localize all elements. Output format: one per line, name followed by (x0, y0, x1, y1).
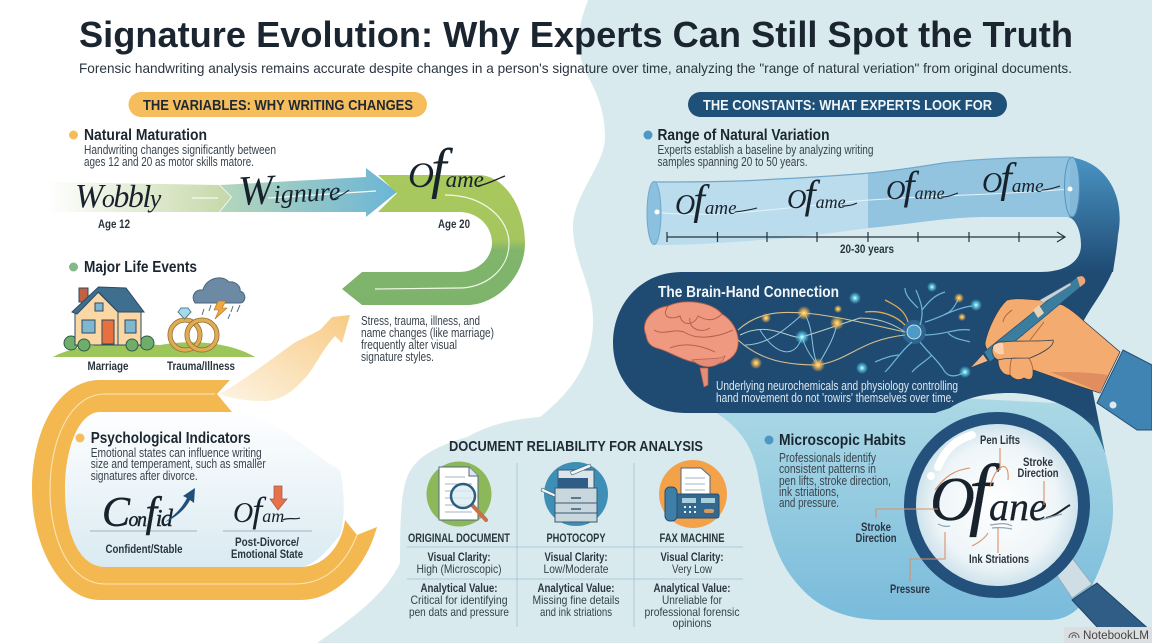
section: natural maturation: Natural Maturation (84, 127, 207, 144)
column: fax machine: Very Low (672, 562, 712, 576)
signature: confident: Confid (102, 490, 174, 536)
arrow: pale orange connector (219, 315, 350, 401)
tube: signature range (647, 157, 1080, 245)
signature: age 20: Ofame (408, 138, 484, 200)
label: age 20: Age 20 (438, 219, 470, 231)
arrow path: maturation ribbon (48, 168, 525, 305)
signatures in tube (675, 156, 1060, 224)
heading pill: the constants (688, 92, 1007, 117)
callout labels (856, 435, 1058, 596)
column: fax machine: FAX MACHINE (660, 531, 724, 545)
column: original document: pen dats and pressure (409, 605, 509, 619)
ground hill (53, 342, 255, 357)
heading pill: the variables: THE VARIABLES: WHY WRITING CHANGES (143, 97, 413, 114)
label: post-divorce: Emotional State (231, 549, 303, 561)
callout labels: Pen Lifts (980, 435, 1020, 447)
badge: notebooklm (1064, 627, 1152, 643)
ribbon: top curve (1040, 157, 1120, 272)
neural network (738, 288, 972, 376)
column: fax machine: professional forensic (644, 605, 740, 619)
label: marriage: Marriage (88, 361, 128, 373)
signature: magnified: Ofane (930, 450, 1047, 538)
section: range of natural variation: samples spanning 20 to 50 years. (658, 155, 808, 169)
icon: rings (170, 308, 217, 350)
icon: brain (644, 302, 738, 387)
signature: wignure: Wignure (237, 164, 341, 215)
icon: magnifying glass (910, 418, 1152, 643)
section: natural maturation: ages 12 and 20 as motor skills matore. (84, 155, 254, 169)
panel: psychological background (62, 408, 344, 570)
section: range of natural variation (644, 127, 874, 169)
title: Signature Evolution: Why Experts Can Still Spot the Truth (79, 14, 1073, 55)
callout labels: Pressure (890, 584, 930, 596)
section: psychological indicators: Psychological Indicators (91, 430, 251, 447)
column: photocopy: Missing fine details (532, 593, 620, 607)
label: trauma/illness: Trauma/Illness (167, 361, 235, 373)
column: original document: High (Microscopic) (416, 562, 502, 576)
column: original document (408, 531, 511, 619)
column: original document: Analytical Value: (420, 581, 498, 595)
heading pill: the constants: THE CONSTANTS: WHAT EXPERTS LOOK FOR (703, 97, 992, 114)
callout labels: Ink Striations (969, 554, 1029, 566)
text: life events description: frequently alter visual (361, 338, 457, 352)
icon: photocopy (541, 462, 608, 526)
callout labels: Stroke (861, 522, 891, 534)
callout labels: Direction (1018, 468, 1058, 480)
callout lines (876, 448, 1044, 582)
column: original document: Visual Clarity: (428, 550, 490, 564)
section: microscopic habits: Professionals identify (779, 451, 877, 465)
section: range of natural variation: Experts establish a baseline by analyzing writing (658, 143, 874, 157)
text: life events description: Stress, trauma, illness, and (361, 314, 480, 328)
signatures in tube: Ofame (886, 163, 945, 208)
section: psychological indicators: signatures after divorce. (91, 469, 198, 483)
column: fax machine: opinions (672, 616, 712, 630)
glowing nodes (750, 282, 982, 378)
icon: fax machine (659, 460, 727, 528)
column: fax machine: Visual Clarity: (660, 550, 724, 564)
panel: brain-hand band (613, 270, 1113, 453)
section: natural maturation (69, 127, 276, 169)
signatures in tube: Ofame (787, 172, 846, 217)
section: microscopic habits (764, 432, 906, 510)
column: fax machine: Analytical Value: (654, 581, 730, 595)
panel: microscopic habits background (715, 395, 1113, 620)
section: microscopic habits: pen lifts, stroke direction, (779, 474, 891, 488)
label: 20-30 years: 20-30 years (840, 244, 894, 256)
section: microscopic habits: and pressure. (779, 496, 839, 510)
signature: confident (90, 488, 197, 536)
text: life events description: signature styles. (361, 350, 434, 364)
heading: major life events: Major Life Events (84, 259, 197, 276)
column: fax machine (644, 531, 740, 630)
table grid (407, 463, 743, 627)
signature: post-divorce: Ofam (233, 490, 284, 530)
text: brain-hand description: hand movement do not 'rowirs' themselves over time. (716, 391, 954, 405)
section: psychological indicators: Emotional states can influence writing (91, 446, 262, 460)
arrow path: orange bracket (32, 380, 377, 600)
text: life events description: name changes (like marriage) (361, 326, 494, 340)
icon: house (64, 287, 154, 351)
signatures in tube: Ofame (982, 156, 1044, 202)
icon: storm cloud (193, 278, 245, 319)
column: original document: ORIGINAL DOCUMENT (408, 531, 511, 545)
signatures in tube: Ofame (675, 178, 737, 224)
column: photocopy: PHOTOCOPY (546, 531, 606, 545)
section: range of natural variation: Range of Natural Variation (658, 127, 830, 144)
timeline (667, 232, 1065, 242)
callout labels: Direction (856, 533, 896, 545)
section: microscopic habits: Microscopic Habits (779, 432, 906, 449)
heading: brain-hand connection: The Brain-Hand Connection (658, 284, 839, 301)
column: original document: Critical for identifying (410, 593, 508, 607)
text: life events description (361, 314, 494, 364)
section: microscopic habits: consistent patterns in (779, 462, 876, 476)
callout labels: Stroke (1023, 457, 1053, 469)
icon: hand with pen (970, 276, 1152, 430)
text: brain-hand description: Underlying neurochemicals and physiology controlling (716, 379, 958, 393)
signature: wobbly: Wobbly (75, 178, 162, 215)
label: confident/stable: Confident/Stable (106, 544, 182, 556)
heading: document reliability: DOCUMENT RELIABILITY FOR ANALYSIS (449, 438, 703, 455)
badge: notebooklm: NotebookLM (1083, 630, 1149, 642)
icon: original document (426, 462, 492, 526)
column: photocopy: Low/Moderate (544, 562, 609, 576)
label: post-divorce (231, 537, 303, 561)
section: psychological indicators (76, 430, 266, 483)
section: natural maturation: Handwriting changes significantly between (84, 143, 276, 157)
text: brain-hand description (716, 379, 958, 405)
section: psychological indicators: size and temperament, such as smaller (91, 457, 266, 471)
heading pill: the variables (128, 92, 427, 117)
label: age 12: Age 12 (98, 219, 130, 231)
column: fax machine: Unreliable for (662, 593, 722, 607)
column: photocopy: Analytical Value: (538, 581, 614, 595)
label: post-divorce: Post-Divorce/ (235, 537, 300, 549)
column: photocopy (532, 531, 620, 619)
signature: post-divorce (223, 486, 312, 531)
section: microscopic habits: ink striations, (779, 485, 839, 499)
column: photocopy: and ink striations (540, 605, 612, 619)
column: photocopy: Visual Clarity: (544, 550, 608, 564)
subtitle: Forensic handwriting analysis remains accurate despite changes in a person's signature over time, analyzing the "range of natural veriation" from original documents. (79, 60, 1072, 76)
